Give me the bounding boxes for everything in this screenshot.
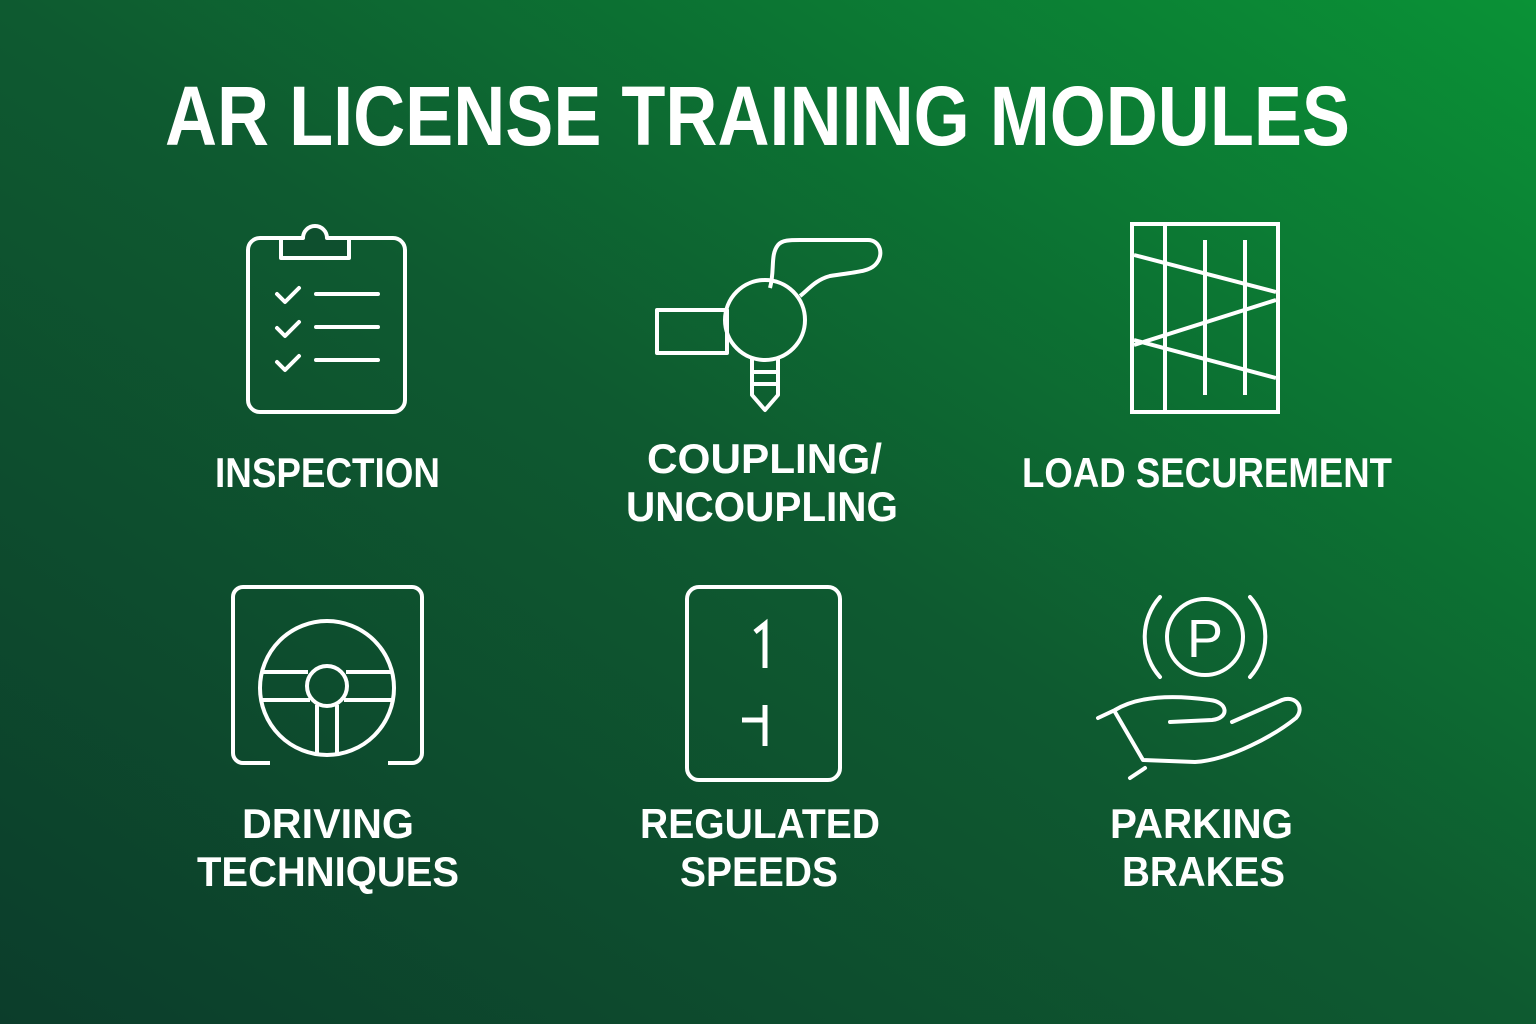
- title: AR LICENSE TRAINING MODULES: [165, 69, 1350, 163]
- label: parking brakes: PARKING: [1110, 800, 1293, 847]
- icon: steering wheel: [233, 587, 422, 763]
- icon: coupling: [657, 240, 880, 410]
- icon: parking brake hand: [1098, 597, 1300, 778]
- icon: clipboard: [248, 226, 405, 412]
- label: parking brakes: BRAKES: [1122, 848, 1285, 895]
- label: regulated speeds: REGULATED: [640, 800, 880, 847]
- icon: gear shift: [687, 587, 840, 780]
- label: coupling: COUPLING/: [647, 435, 882, 482]
- label: regulated speeds: [640, 800, 880, 895]
- label: driving techniques: [197, 800, 459, 895]
- icon: load securement: [1132, 224, 1278, 412]
- label: load securement: LOAD SECUREMENT: [1022, 449, 1392, 496]
- label: coupling: [626, 435, 898, 530]
- label: regulated speeds: SPEEDS: [680, 848, 838, 895]
- label: inspection: INSPECTION: [215, 449, 440, 496]
- label: driving techniques: TECHNIQUES: [197, 848, 459, 895]
- icon: parking brake hand: P: [1187, 609, 1223, 669]
- label: coupling: UNCOUPLING: [626, 483, 898, 530]
- label: driving techniques: DRIVING: [242, 800, 414, 847]
- label: parking brakes: [1110, 800, 1293, 895]
